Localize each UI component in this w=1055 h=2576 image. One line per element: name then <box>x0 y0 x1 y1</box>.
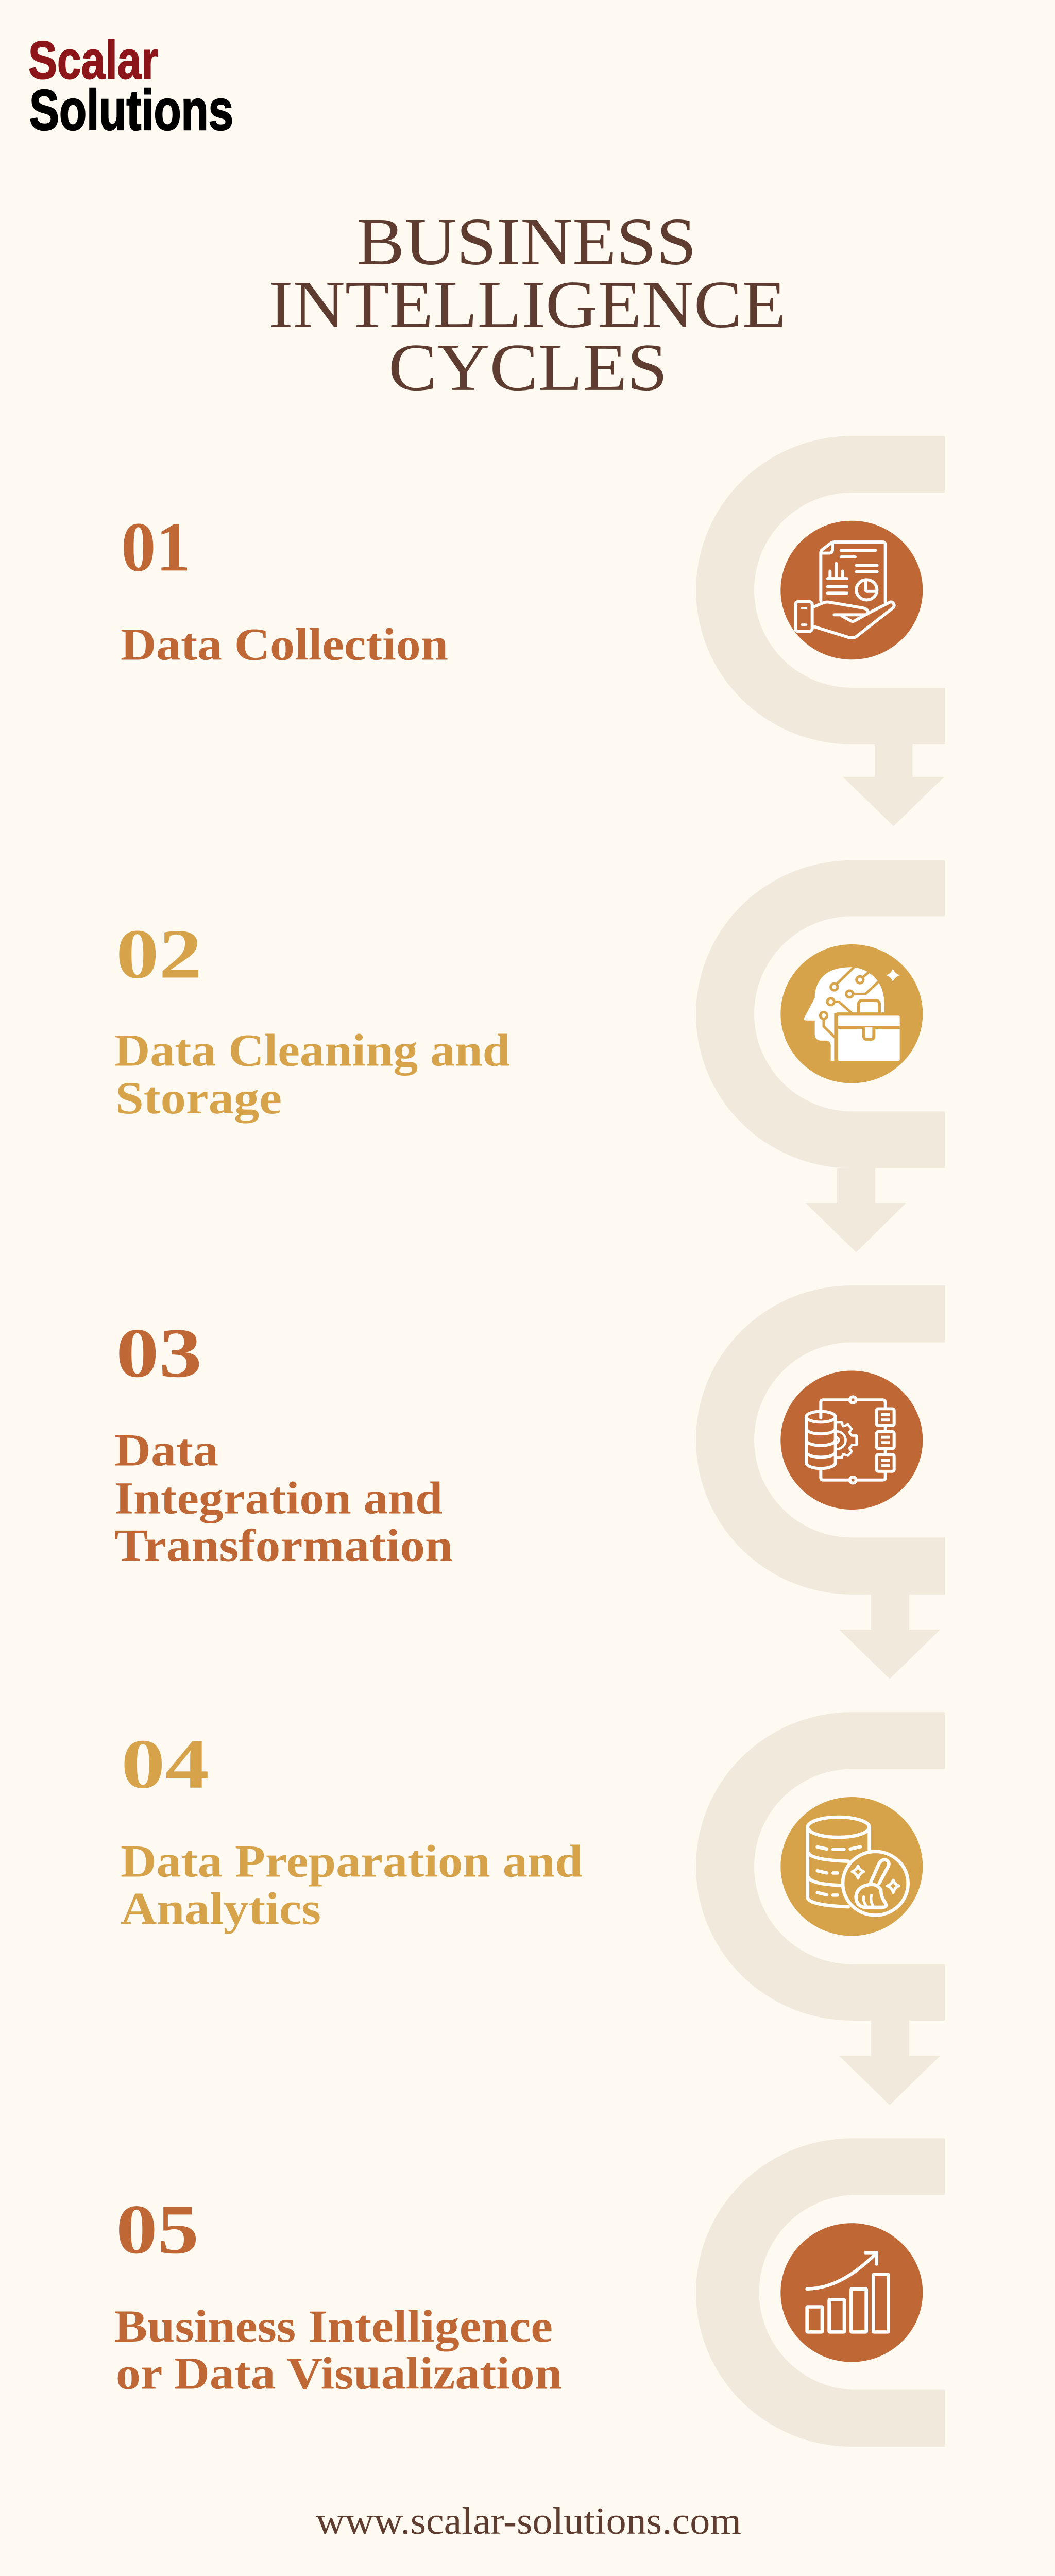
step 4 label: Data Preparation and <box>121 1837 583 1887</box>
step 5 number: 05 <box>116 2191 199 2268</box>
step 4 cycle shape and arrow <box>696 1712 945 2105</box>
footer website url: www.scalar-solutions.com <box>316 2500 741 2543</box>
step 5 label: Business Intelligence <box>114 2301 553 2352</box>
icon: document report on hand <box>780 521 923 659</box>
step 4 number: 04 <box>121 1725 209 1803</box>
step 2 label: Storage <box>115 1073 282 1124</box>
step 2 number: 02 <box>116 915 202 993</box>
logo: Scalar <box>28 30 158 90</box>
title: CYCLES <box>388 330 668 404</box>
step 3 label: Integration and <box>114 1473 443 1523</box>
step 5 cycle shape <box>696 2138 945 2447</box>
panel: step 3 data integration and transformation <box>114 1285 945 1679</box>
step 5 label <box>114 2301 562 2399</box>
panel: step 5 business intelligence or data visualization <box>114 2138 945 2447</box>
step 5 label: or Data Visualization <box>116 2349 562 2399</box>
panel: step 2 data cleaning and storage <box>114 860 945 1252</box>
panel: step 1 data collection <box>121 436 945 826</box>
icon: database gear and flow <box>780 1370 923 1510</box>
logo <box>28 30 233 142</box>
step 3 label <box>114 1426 453 1571</box>
title <box>269 204 786 404</box>
icon: database with broom <box>780 1797 923 1936</box>
icon: AI head with briefcase <box>780 944 923 1083</box>
icon: growth bar chart with arrow <box>780 2223 923 2362</box>
title: BUSINESS <box>356 204 696 279</box>
step 3 cycle shape and arrow <box>696 1285 945 1679</box>
step 2 label <box>114 1025 510 1124</box>
panel: step 4 data preparation and analytics <box>121 1712 945 2105</box>
step 1 label: Data Collection <box>121 619 448 670</box>
step 3 label: Transformation <box>114 1520 453 1571</box>
step 3 number: 03 <box>116 1314 202 1392</box>
step 3 label: Data <box>114 1426 218 1476</box>
step 4 label <box>121 1837 583 1934</box>
logo: Solutions <box>29 78 233 142</box>
step 1 cycle shape and arrow <box>696 436 945 826</box>
step 2 cycle shape and arrow <box>696 860 945 1252</box>
step 4 label: Analytics <box>121 1884 321 1934</box>
step 1 number: 01 <box>121 508 191 586</box>
step 2 label: Data Cleaning and <box>114 1025 510 1076</box>
title: INTELLIGENCE <box>269 267 786 342</box>
